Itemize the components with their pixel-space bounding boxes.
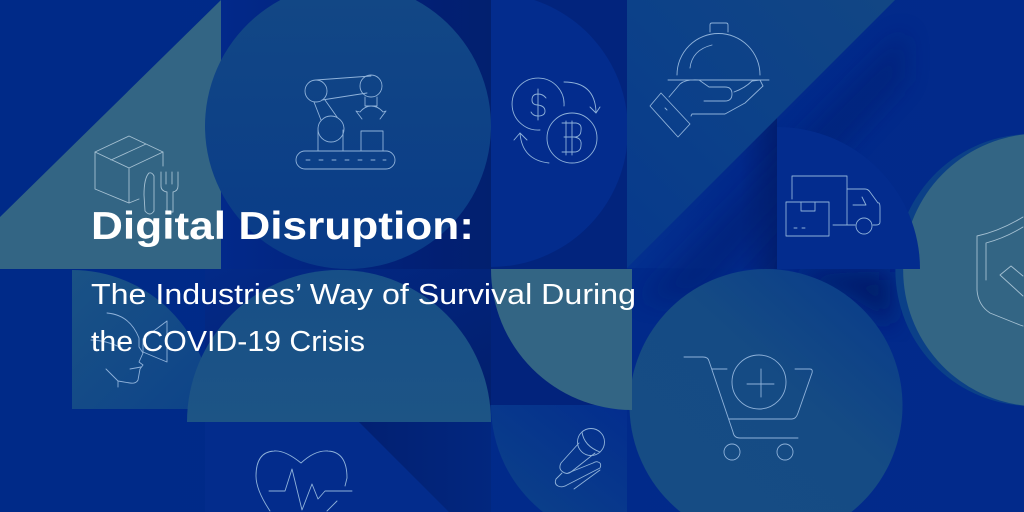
icon: currency exchange	[512, 78, 600, 163]
panel: teal triangle	[0, 0, 221, 269]
subtitle	[91, 279, 636, 358]
icon: heart with pulse	[256, 451, 352, 511]
icon: delivery truck and parcel	[786, 176, 880, 236]
icon: shopping cart	[684, 355, 812, 460]
dark panel under face and half disc	[205, 269, 491, 405]
panel: cloche triangle	[627, 0, 895, 268]
panel: face quarter circle	[72, 270, 211, 409]
dark wedge below cloche triangle	[627, 118, 777, 269]
panel: shield circle shadow	[895, 134, 1024, 406]
subtitle: the COVID-19 Crisis	[91, 326, 365, 358]
panel: teal quarter circle	[491, 269, 632, 410]
panel: cart circle	[630, 269, 903, 512]
panel: currency half circle	[491, 0, 628, 267]
panel: robot circle	[205, 0, 491, 269]
panel: shield circle	[903, 134, 1024, 406]
icon: box and cutlery	[95, 136, 178, 214]
dark panel behind currency half circle	[491, 0, 627, 269]
dark panel behind robot circle	[221, 0, 491, 269]
panel: truck quarter circle	[777, 127, 920, 269]
icon: shield with check	[977, 217, 1023, 326]
icon: hand holding cloche	[650, 23, 769, 137]
icon: face profile	[91, 313, 167, 387]
lower heart panel	[205, 405, 449, 512]
lower dark diagonal panel	[342, 405, 491, 512]
panel: half disc	[187, 270, 491, 422]
icon: robot arm on conveyor	[296, 75, 395, 169]
panel: microphone quarter circle	[491, 405, 627, 512]
title: Digital Disruption:	[91, 205, 474, 248]
subtitle: The Industries’ Way of Survival During	[91, 279, 636, 311]
dark panel behind teal quarter	[491, 269, 632, 405]
icon: microphone	[555, 428, 604, 489]
